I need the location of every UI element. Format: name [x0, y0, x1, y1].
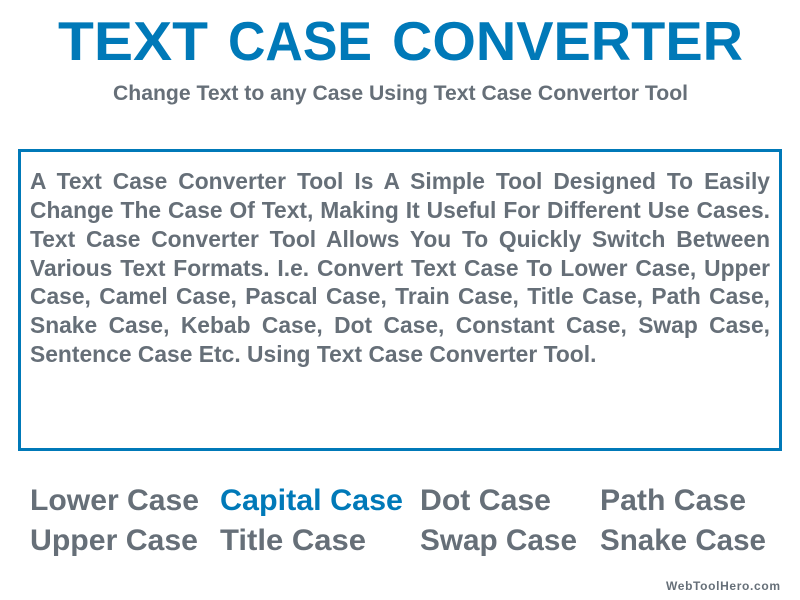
body paragraph: Sentence Case Etc. Using Text Case Converter Tool. — [30, 341, 596, 367]
subtitle: Change Text to any Case Using Text Case Convertor Tool — [113, 82, 688, 105]
body paragraph — [30, 167, 790, 377]
body paragraph: Various Text Formats. I.e. Convert Text Case To Lower Case, Upper — [30, 255, 770, 281]
body paragraph: Text Case Converter Tool Allows You To Quickly Switch Between — [30, 226, 770, 252]
option: upper case: Upper Case — [30, 524, 198, 557]
body paragraph: Change The Case Of Text, Making It Useful For Different Use Cases. — [30, 197, 770, 223]
body paragraph: A Text Case Converter Tool Is A Simple Tool Designed To Easily — [30, 168, 770, 194]
panel: text box — [20, 150, 790, 450]
title: TEXT — [58, 10, 208, 72]
option: swap case: Swap Case — [420, 524, 577, 557]
option: dot case: Dot Case — [420, 484, 551, 517]
footer credit: WebToolHero.com — [666, 579, 780, 593]
option: capital case (selected): Capital Case — [220, 484, 403, 517]
title — [58, 10, 743, 72]
case options list — [30, 484, 766, 557]
option: path case: Path Case — [600, 484, 746, 517]
option: title case: Title Case — [220, 524, 366, 557]
title: CONVERTER — [392, 10, 743, 72]
option: lower case: Lower Case — [30, 484, 199, 517]
title: CASE — [228, 10, 372, 72]
body paragraph: Snake Case, Kebab Case, Dot Case, Constant Case, Swap Case, — [30, 312, 770, 338]
option: snake case: Snake Case — [600, 524, 766, 557]
panel border — [20, 150, 780, 450]
body paragraph: Case, Camel Case, Pascal Case, Train Case, Title Case, Path Case, — [30, 283, 770, 309]
